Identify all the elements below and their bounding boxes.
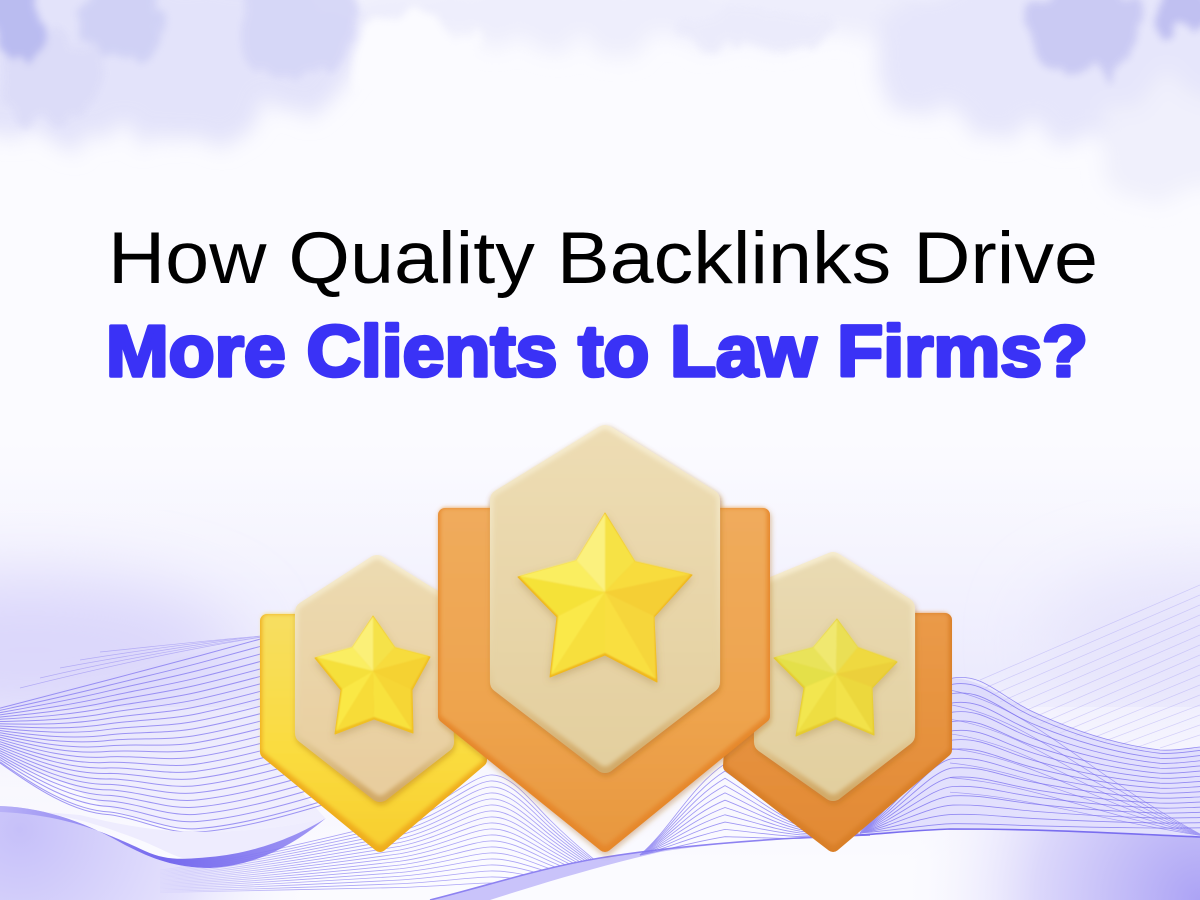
badge: right orange bbox=[730, 563, 945, 845]
right wave fill bbox=[860, 678, 1200, 837]
badge: left yellow bbox=[267, 566, 480, 845]
right wave base line bbox=[860, 829, 1200, 837]
center right line family bbox=[640, 751, 870, 855]
right line family bbox=[860, 677, 1200, 833]
badge: center orange bbox=[445, 436, 763, 845]
left line family bbox=[0, 615, 340, 894]
heading line 1: How Quality Backlinks Drive bbox=[108, 218, 1098, 299]
right diagonal line family bbox=[950, 690, 1200, 835]
center badge plate bbox=[501, 436, 709, 762]
faint upper right lines bbox=[980, 585, 1200, 748]
center lower wave bbox=[430, 835, 870, 900]
left star bbox=[315, 616, 430, 734]
right badge plate bbox=[765, 563, 904, 790]
left badge plate bbox=[306, 566, 443, 791]
heading line 2: More Clients to Law Firms? bbox=[106, 312, 1088, 392]
left ribbon bbox=[0, 806, 326, 868]
center badge base bbox=[445, 515, 763, 845]
title bbox=[106, 218, 1098, 392]
clouds bbox=[0, 0, 1200, 200]
faint upper left lines bbox=[20, 636, 262, 688]
right star bbox=[774, 619, 897, 736]
left wave fill bbox=[0, 636, 325, 832]
middle line family bbox=[168, 774, 594, 892]
right badge base bbox=[730, 620, 945, 845]
center star bbox=[518, 513, 692, 682]
left badge base bbox=[267, 621, 480, 845]
